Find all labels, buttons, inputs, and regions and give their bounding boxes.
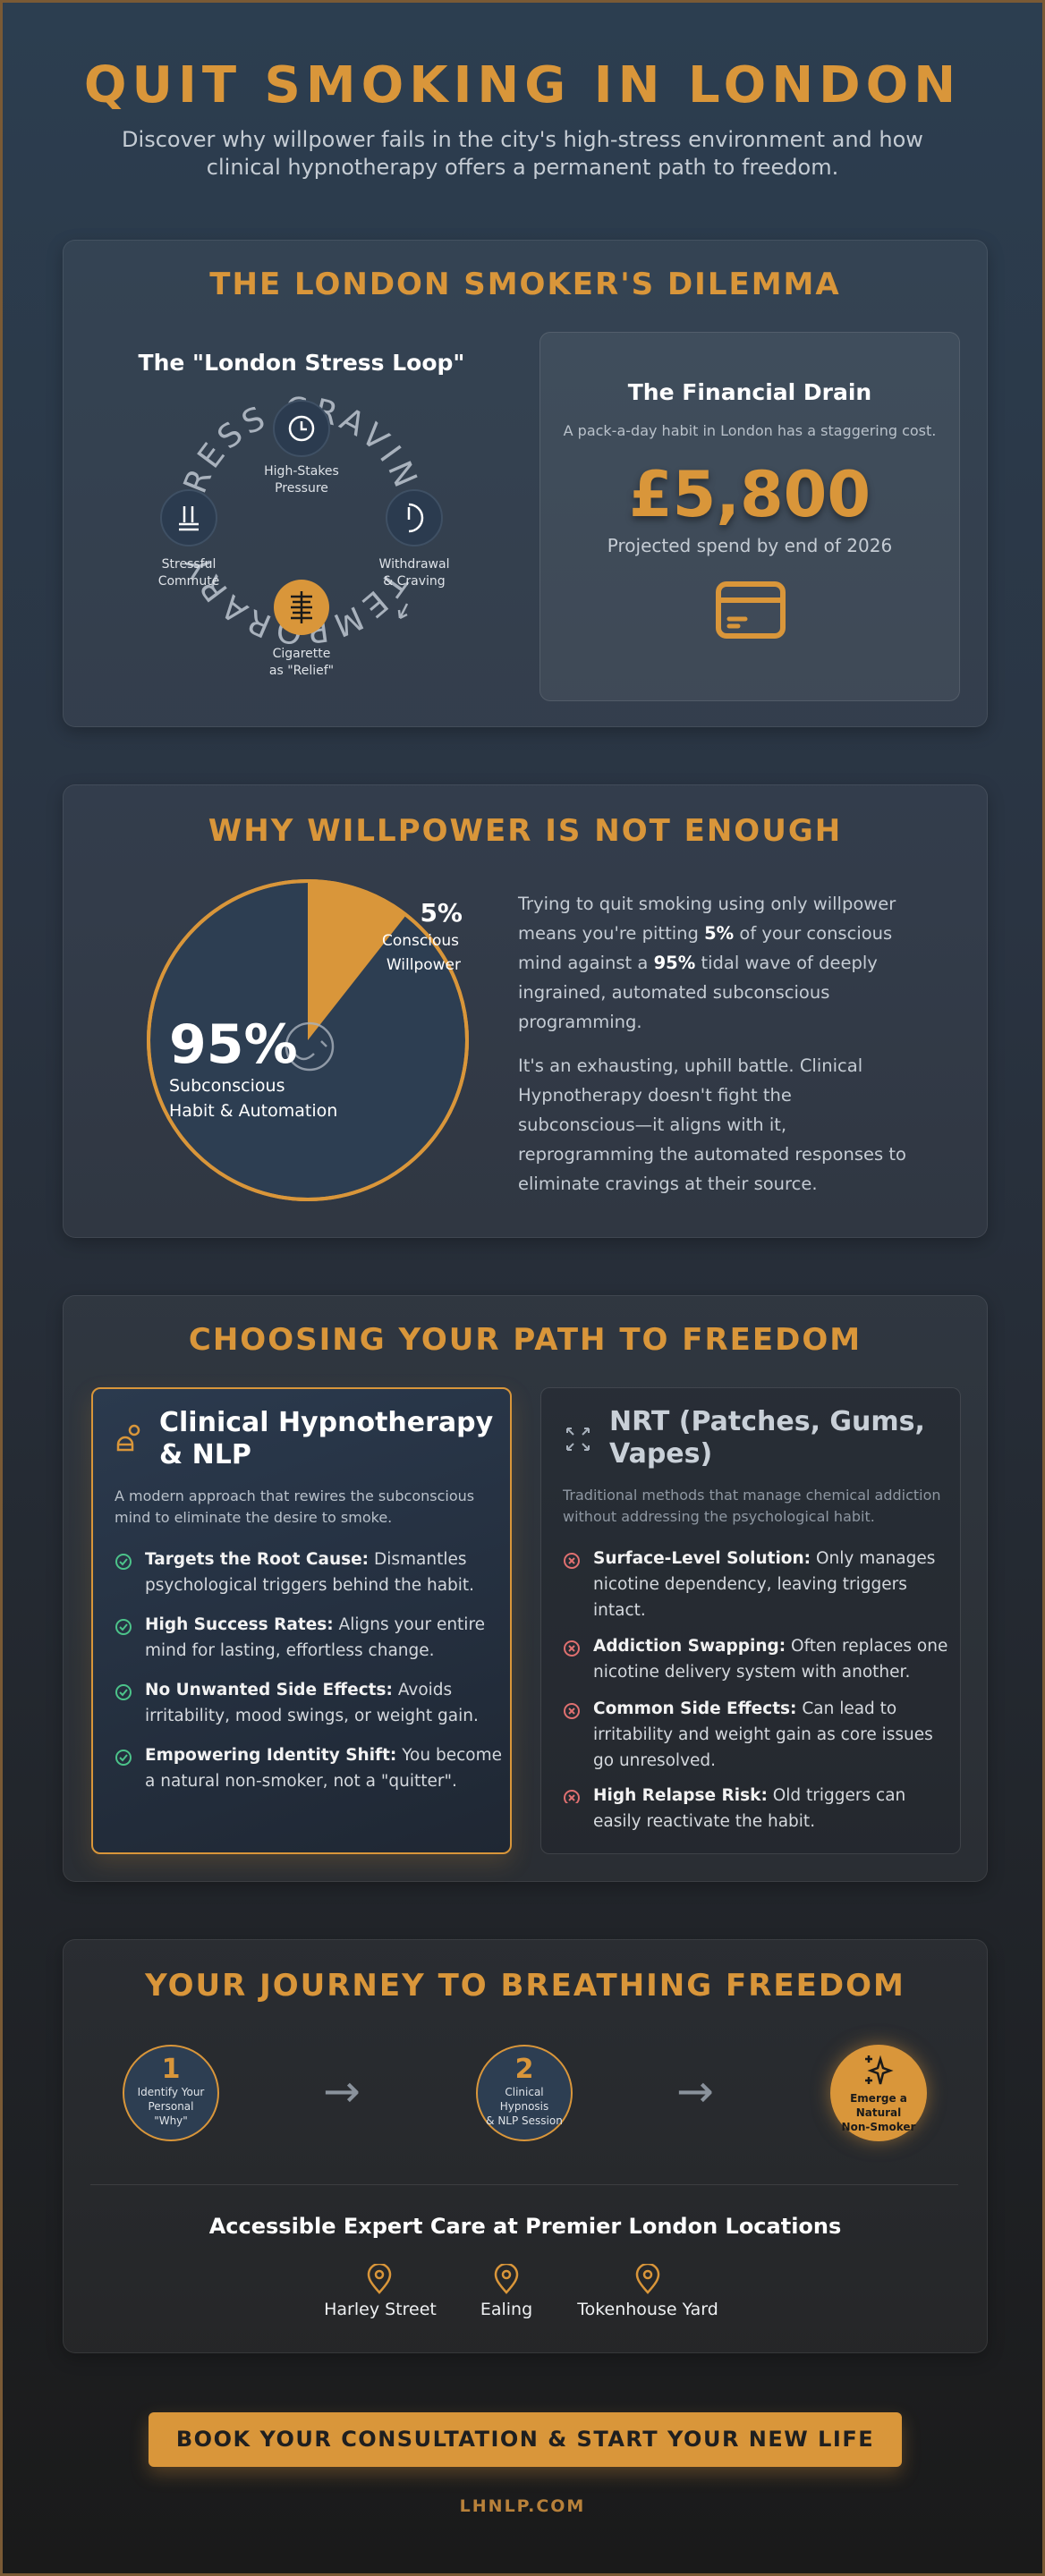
step 2: Hypnosis <box>500 2100 548 2113</box>
benefits list: Empowering Identity Shift: You become a natural non-smoker, not a "quitter". <box>145 1746 502 1791</box>
node: cigarette: Cigarette <box>273 647 330 661</box>
label 95%: 95% <box>169 1013 298 1076</box>
drawbacks list: Addiction Swapping: Often replaces one nicotine delivery system with another. <box>593 1637 947 1682</box>
node: pressure: High-Stakes <box>264 464 339 479</box>
drawbacks list: Surface-Level Solution: Only manages nicotine dependency, leaving triggers intact. <box>593 1549 935 1620</box>
text block: willpower: Trying to quit smoking using only willpower <box>518 894 896 914</box>
step 3 <box>830 2045 927 2141</box>
title: hypnotherapy: Clinical Hypnotherapy & NLP <box>159 1407 493 1470</box>
desc: Traditional methods that manage chemical addiction without addressing the psychological habit. <box>563 1487 941 1525</box>
step 1: Personal <box>148 2100 193 2113</box>
step 1: "Why" <box>154 2114 188 2127</box>
text block: willpower <box>517 894 906 1194</box>
heading: journey: YOUR JOURNEY TO BREATHING FREEDOM <box>145 1968 905 2004</box>
drawbacks list: Common Side Effects: Can lead to irritability and weight gain as core issues go unresolved. <box>593 1699 933 1770</box>
step 1 <box>123 2045 219 2141</box>
node: commute: Commute <box>158 574 219 589</box>
subtitle: Discover why willpower fails in the city's high-stress environment and how <box>122 127 923 152</box>
text block: willpower: It's an exhausting, uphill battle. Clinical <box>518 1055 862 1076</box>
label 5% <box>382 898 463 974</box>
node: pressure <box>264 401 339 496</box>
arrow 2: → <box>676 2065 714 2117</box>
node: withdrawal: Withdrawal <box>379 557 449 572</box>
stress loop diagram: TEMPORARY R <box>184 560 410 644</box>
node: commute <box>158 490 219 589</box>
text block: willpower: means you're pitting 5% of your conscious <box>518 923 892 944</box>
label 5%: 5% <box>420 898 463 928</box>
text block: willpower: Hypnotherapy doesn't fight the <box>518 1085 792 1106</box>
benefits list: Targets the Root Cause: Dismantles psychological triggers behind the habit. <box>145 1550 474 1595</box>
label 5%: Willpower <box>387 956 461 974</box>
icon: credit card <box>716 581 786 639</box>
panel: journey <box>63 1939 988 2353</box>
step 3: Emerge a <box>850 2092 907 2105</box>
big number: £5,800 <box>629 458 871 531</box>
text block: willpower: mind against a 95% tidal wave of deeply <box>518 953 878 973</box>
pie chart <box>147 879 469 1201</box>
locations <box>324 2264 718 2319</box>
heading: willpower: WHY WILLPOWER IS NOT ENOUGH <box>208 813 842 849</box>
step 2: 2 <box>515 2054 533 2085</box>
node: withdrawal: & Craving <box>383 574 446 589</box>
arrow 1: → <box>323 2065 361 2117</box>
step 2 <box>476 2045 573 2141</box>
node: commute: Stressful <box>162 557 216 572</box>
step 2: & NLP Session <box>486 2114 563 2127</box>
benefits list: No Unwanted Side Effects: Avoids irritability, mood swings, or weight gain. <box>145 1681 479 1725</box>
card: NRT <box>540 1387 961 1854</box>
text block: willpower: programming. <box>518 1012 642 1032</box>
step 1: Identify Your <box>138 2086 204 2098</box>
benefits list <box>115 1550 502 1791</box>
panel: path to freedom <box>63 1295 988 1882</box>
drawbacks list <box>564 1549 947 1831</box>
label 95%: Subconscious <box>169 1076 285 1096</box>
financial title: The Financial Drain <box>628 379 871 405</box>
title: NRT: NRT (Patches, Gums, Vapes) <box>609 1406 925 1470</box>
desc: A modern approach that rewires the subconscious mind to eliminate the desire to smoke. <box>115 1487 474 1526</box>
text block: willpower: subconscious—it aligns with it, <box>518 1114 786 1135</box>
subtitle: clinical hypnotherapy offers a permanent path to freedom. <box>207 155 838 180</box>
label 5%: Conscious <box>382 932 459 950</box>
heading: dilemma: THE LONDON SMOKER'S DILEMMA <box>209 267 841 302</box>
locations: Ealing <box>480 2300 532 2319</box>
text block: willpower: reprogramming the automated responses to <box>518 1144 906 1165</box>
card: financial drain <box>539 332 960 701</box>
financial subtitle: A pack-a-day habit in London has a staggering cost. <box>564 422 936 439</box>
panel: willpower <box>63 784 988 1238</box>
projected text: Projected spend by end of 2026 <box>607 535 892 556</box>
locations heading: Accessible Expert Care at Premier London Locations <box>209 2214 841 2239</box>
heading: path: CHOOSING YOUR PATH TO FREEDOM <box>189 1322 862 1358</box>
step 3: Natural <box>856 2106 901 2119</box>
text block: willpower: eliminate cravings at their source. <box>518 1174 818 1194</box>
CTA button: BOOK YOUR CONSULTATION & START YOUR NEW LIFE <box>176 2427 874 2452</box>
panel: dilemma <box>63 240 988 727</box>
benefits list: High Success Rates: Aligns your entire mind for lasting, effortless change. <box>145 1615 485 1660</box>
stress loop diagram: RESS CRAVING <box>183 396 418 493</box>
node: withdrawal <box>379 490 449 618</box>
step 3: Non-Smoker <box>842 2121 915 2133</box>
subtitle <box>122 127 923 180</box>
step 2: Clinical <box>505 2086 544 2098</box>
drawbacks list: High Relapse Risk: Old triggers can easily reactivate the habit. <box>593 1786 905 1831</box>
locations: Harley Street <box>324 2300 437 2319</box>
title: QUIT SMOKING IN LONDON <box>84 56 961 114</box>
card: hypnotherapy <box>91 1387 512 1854</box>
text block: willpower: ingrained, automated subconscious <box>518 982 829 1003</box>
CTA button <box>149 2412 902 2467</box>
locations: Tokenhouse Yard <box>577 2300 718 2319</box>
loop title: The "London Stress Loop" <box>139 350 464 376</box>
node: cigarette: as "Relief" <box>269 664 334 678</box>
stress loop diagram <box>158 396 449 678</box>
step 1: 1 <box>162 2054 180 2085</box>
footer url: LHNLP.COM <box>460 2496 585 2516</box>
node: pressure: Pressure <box>275 481 328 496</box>
label 95% <box>169 1013 337 1121</box>
icon: person <box>116 1424 140 1451</box>
label 95%: Habit & Automation <box>169 1101 337 1121</box>
icon: arrows <box>566 1428 590 1451</box>
node: cigarette <box>269 580 334 678</box>
